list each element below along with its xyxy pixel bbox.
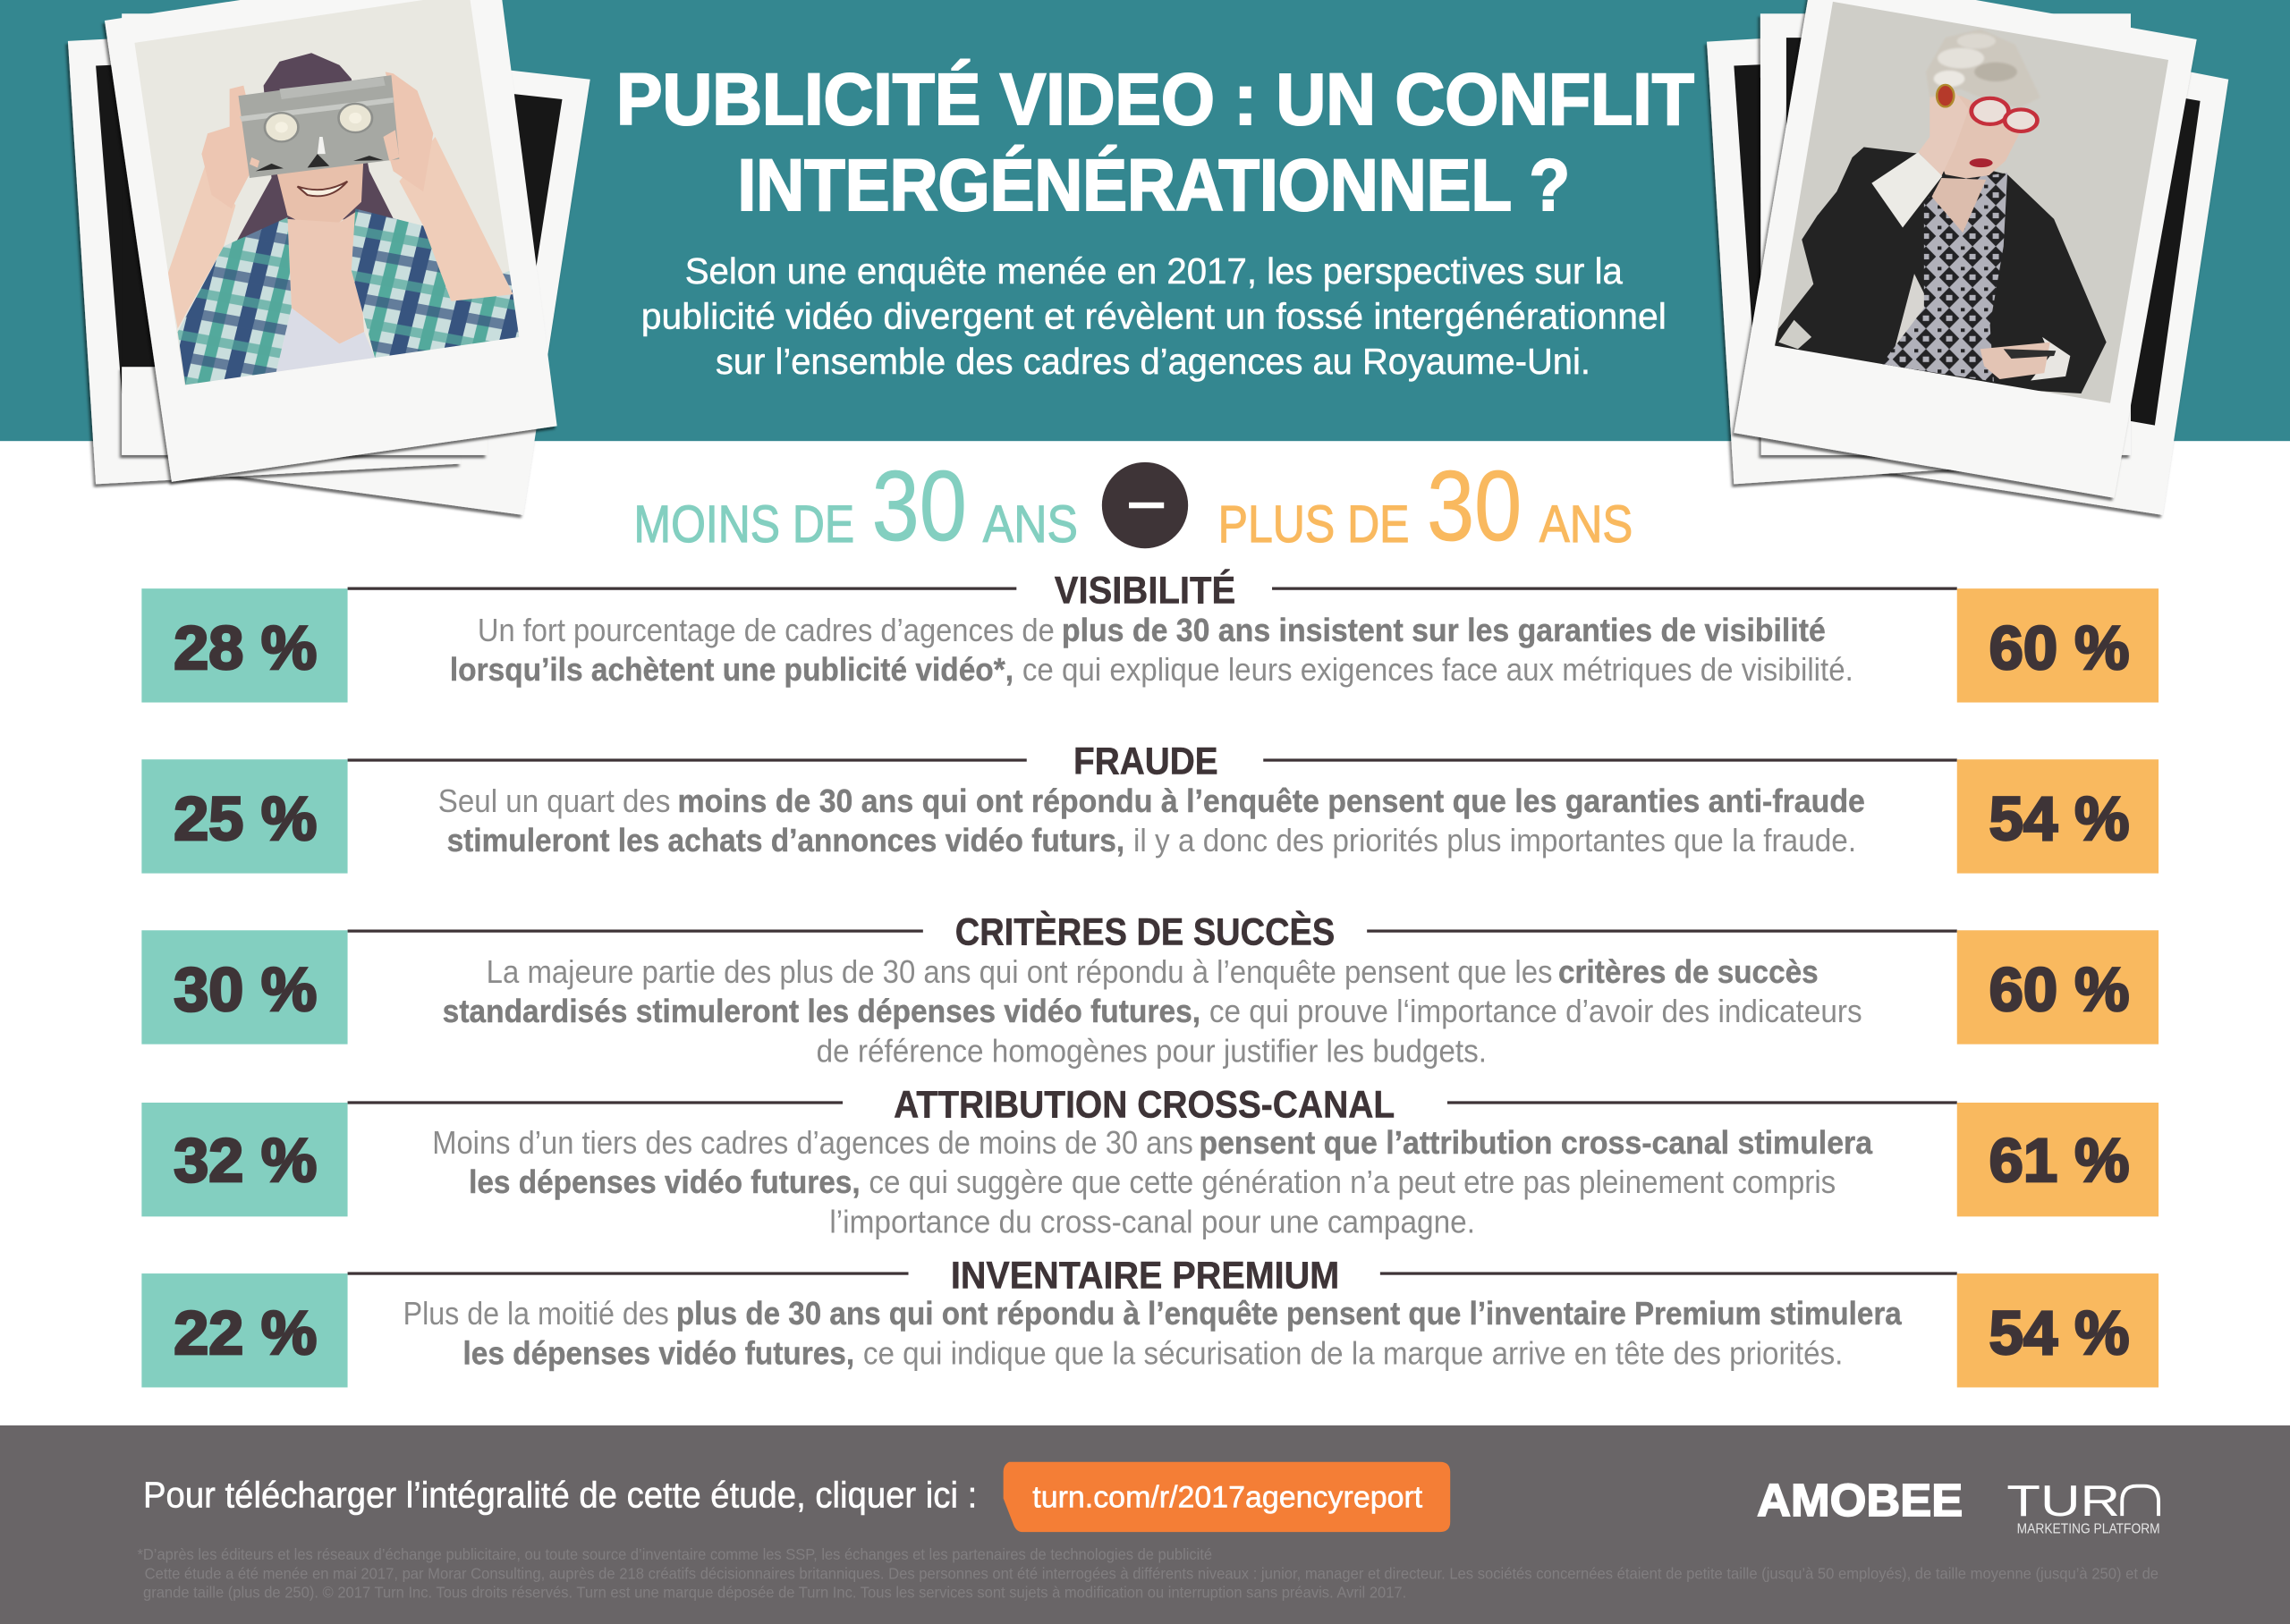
stat: over 30, 60 % — [1957, 930, 2159, 1045]
legend: over 30 — [1218, 450, 1633, 562]
heading: attribution cross-canal: ATTRIBUTION CROSS-CANAL — [894, 1083, 1395, 1125]
logo: Turn Marketing Platform: TUR N — [2006, 1477, 2160, 1526]
heading: fraude: FRAUDE — [1073, 740, 1218, 782]
legend: under 30: 30 — [872, 450, 967, 562]
stat: under 30, 30 % — [141, 930, 348, 1045]
row: fraude — [141, 740, 2159, 874]
text: visibilité: ce qui explique leurs exigences face aux métriques de visibilité. — [1022, 651, 1853, 688]
legend: under 30 — [634, 450, 1078, 562]
heading: critères de succès: CRITÈRES DE SUCCÈS — [955, 911, 1335, 953]
text: critères de succès: standardisés stimuleront les dépenses vidéo futures, — [443, 993, 1200, 1029]
heading: inventaire premium: INVENTAIRE PREMIUM — [951, 1254, 1339, 1296]
stat: under 30, 22 %: 22 % — [174, 1298, 317, 1367]
logo: Turn Marketing Platform: MARKETING PLATFORM — [2017, 1522, 2160, 1537]
legend: over 30: ANS — [1539, 495, 1633, 554]
text: attribution cross-canal: ce qui suggère que cette génération n’a peut etre pas pleinement compris — [869, 1163, 1836, 1200]
stat: under 30, 25 %: 25 % — [174, 784, 317, 853]
row: inventaire premium — [141, 1254, 2159, 1387]
text: fraude: il y a donc des priorités plus importantes que la fraude. — [1133, 822, 1856, 859]
title — [616, 59, 1694, 226]
row: critères de succès — [141, 911, 2159, 1069]
stat: over 30, 54 % — [1957, 1273, 2159, 1387]
link button — [1004, 1462, 1450, 1532]
intro paragraph — [641, 250, 1667, 382]
logo: Amobee: AMOBEE — [1757, 1475, 1963, 1526]
stat: over 30, 60 %: 60 % — [1989, 955, 2129, 1024]
icon: minus circle — [1102, 462, 1188, 548]
text: fraude — [438, 782, 1865, 859]
header band — [0, 0, 2290, 441]
title: INTERGÉNÉRATIONNEL ? — [737, 145, 1570, 226]
intro paragraph: sur l’ensemble des cadres d’agences au Royaume-Uni. — [716, 341, 1590, 382]
intro paragraph: publicité vidéo divergent et révèlent un fossé intergénérationnel — [641, 295, 1667, 336]
text: inventaire premium: Plus de la moitié des — [403, 1295, 669, 1332]
row: visibilité — [141, 569, 2159, 703]
stat: under 30, 22 % — [141, 1273, 348, 1387]
text: visibilité: plus de 30 ans insistent sur les garanties de visibilité — [1062, 612, 1826, 648]
text: inventaire premium: les dépenses vidéo futures, — [463, 1334, 854, 1371]
right polaroid stack: older woman with smartphone — [1707, 0, 2228, 515]
stat: under 30, 32 %: 32 % — [174, 1126, 317, 1195]
footnote text — [137, 1545, 2159, 1602]
left polaroid stack: young woman with VHS tape — [68, 0, 590, 515]
text: attribution cross-canal — [432, 1124, 1873, 1239]
text: attribution cross-canal: les dépenses vidéo futures, — [469, 1163, 861, 1200]
generation legend — [634, 450, 1633, 562]
text: inventaire premium: ce qui indique que la sécurisation de la marque arrive en tête des priorités. — [863, 1334, 1843, 1371]
text: visibilité: Un fort pourcentage de cadres d’agences de — [478, 612, 1055, 648]
stat: under 30, 28 %: 28 % — [174, 613, 317, 682]
intro paragraph: Selon une enquête menée en 2017, les perspectives sur la — [685, 250, 1623, 292]
stat: over 30, 61 %: 61 % — [1989, 1126, 2129, 1195]
text: inventaire premium: plus de 30 ans qui ont répondu à l’enquête pensent que l’inventaire Premium stimulera — [676, 1295, 1903, 1332]
text: inventaire premium — [403, 1295, 1903, 1371]
legend: under 30: ANS — [983, 495, 1078, 554]
legend: over 30: 30 — [1427, 450, 1522, 562]
stat: over 30, 60 % — [1957, 588, 2159, 703]
stat: under 30, 28 % — [141, 588, 348, 703]
stat: over 30, 54 %: 54 % — [1989, 784, 2129, 853]
call to action text: Pour télécharger l’intégralité de cette étude, cliquer ici : — [143, 1474, 977, 1515]
stat: under 30, 25 % — [141, 759, 348, 874]
stat: over 30, 54 % — [1957, 759, 2159, 874]
text: critères de succès: ce qui prouve l‘importance d’avoir des indicateurs — [1209, 993, 1862, 1029]
text: critères de succès: de référence homogènes pour justifier les budgets. — [817, 1032, 1487, 1069]
text: attribution cross-canal: l’importance du cross-canal pour une campagne. — [829, 1203, 1475, 1239]
footnote text: Cette étude a été menée en mai 2017, par Morar Consulting, auprès de 218 créatifs décisionnaires britanniques. Des personnes ont été interrogées à différents niveaux : junior, manager et directeur. Les sociétés concernées étaient de petite taille (jusqu’à 50 employés), de taille moyenne (jusqu’à 250) et de — [145, 1564, 2159, 1582]
text: critères de succès — [443, 953, 1862, 1069]
text: visibilité — [450, 612, 1853, 688]
stat: over 30, 54 %: 54 % — [1989, 1298, 2129, 1367]
footer panel — [0, 1425, 2290, 1624]
footnote text: grande taille (plus de 250). © 2017 Turn Inc. Tous droits réservés. Turn est une marque déposée de Turn Inc. Tous les services sont sujets à modification ou interruption sans préavis. Avril 2017. — [143, 1584, 1406, 1602]
text: fraude: moins de 30 ans qui ont répondu à l’enquête pensent que les garanties anti-fraude — [678, 782, 1865, 819]
text: attribution cross-canal: Moins d’un tiers des cadres d’agences de moins de 30 ans — [432, 1124, 1193, 1161]
link button: turn.com/r/2017agencyreport — [1032, 1480, 1423, 1514]
text: visibilité: lorsqu’ils achètent une publicité vidéo*, — [450, 651, 1014, 688]
stat: over 30, 61 % — [1957, 1103, 2159, 1216]
stat: under 30, 30 %: 30 % — [174, 955, 317, 1024]
text: fraude: Seul un quart des — [438, 782, 670, 819]
text: critères de succès: La majeure partie des plus de 30 ans qui ont répondu à l’enquête pensent que les — [487, 953, 1553, 990]
text: critères de succès: critères de succès — [1558, 953, 1819, 990]
text: attribution cross-canal: pensent que l’attribution cross-canal stimulera — [1199, 1124, 1873, 1161]
heading: visibilité: VISIBILITÉ — [1055, 569, 1235, 611]
legend: over 30: PLUS DE — [1218, 495, 1410, 554]
footnote text: *D’après les éditeurs et les réseaux d’échange publicitaire, ou toute source d’inventaire comme les SSP, les échanges et les partenaires de technologies de publicité — [137, 1545, 1212, 1563]
stat: under 30, 32 % — [141, 1103, 348, 1216]
legend: under 30: MOINS DE — [634, 495, 854, 554]
title: PUBLICITÉ VIDEO : UN CONFLIT — [616, 59, 1694, 140]
row: attribution cross-canal — [141, 1083, 2159, 1239]
stat: over 30, 60 %: 60 % — [1989, 613, 2129, 682]
text: fraude: stimuleront les achats d’annonces vidéo futurs, — [447, 822, 1124, 859]
